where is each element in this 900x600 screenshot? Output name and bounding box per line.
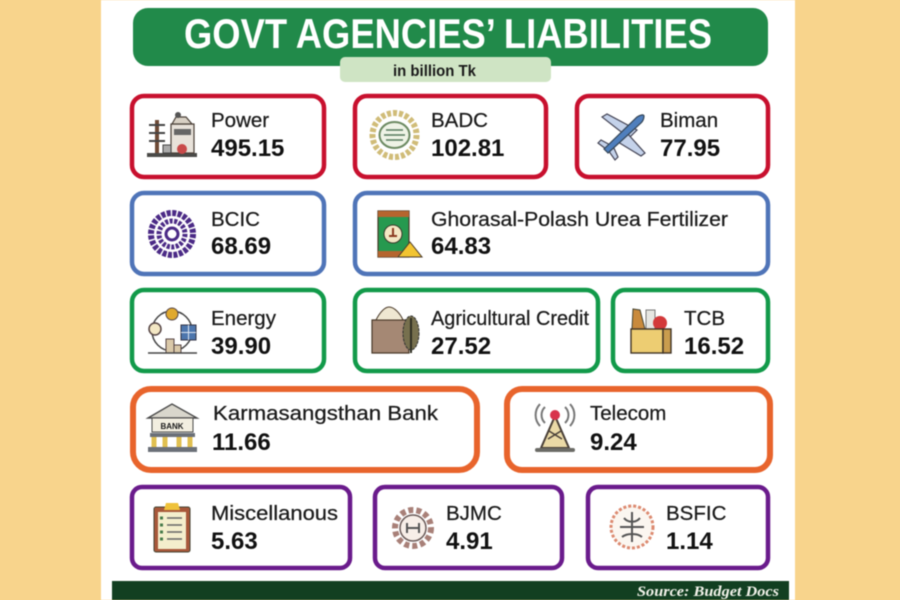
icon: clipboard	[154, 503, 190, 552]
panel: Biman: Biman	[660, 109, 718, 132]
panel: BCIC: 68.69	[211, 233, 271, 260]
panel: Agricultural Credit: 27.52	[431, 333, 491, 360]
panel: Telecom: Telecom	[590, 402, 666, 425]
panel: TCB: 16.52	[684, 333, 744, 360]
panel: Karmasangsthan Bank: 11.66	[212, 429, 271, 456]
panel: BCIC	[132, 193, 324, 274]
icon: BSFIC emblem	[611, 506, 653, 548]
panel: Energy: 39.90	[211, 333, 271, 360]
icon: BADC emblem	[372, 113, 416, 157]
footer bar with source	[112, 581, 789, 600]
icon: energy circle	[148, 308, 197, 353]
icon: fertilizer bag	[378, 211, 422, 257]
panel: BADC: 102.81	[431, 135, 504, 162]
icon: bank building: BANK	[160, 422, 184, 431]
panel: Power: Power	[211, 109, 269, 132]
subtitle: in billion Tk	[340, 57, 551, 82]
panel: BJMC: BJMC	[446, 502, 502, 525]
panel: BSFIC: 1.14	[666, 528, 713, 555]
panel: Energy	[132, 290, 324, 371]
panel: Biman: 77.95	[660, 135, 720, 162]
panel: Miscellanous: 5.63	[211, 528, 258, 555]
panel: Telecom: 9.24	[590, 429, 637, 456]
panel: Agricultural Credit	[355, 290, 598, 371]
panel: Ghorasal-Polash Urea Fertilizer: Ghorasal-Polash Urea Fertilizer	[431, 208, 728, 231]
icon: power pole and building	[147, 112, 197, 157]
title banner: GOVT AGENCIES’ LIABILITIES	[184, 10, 712, 57]
panel: BCIC: BCIC	[211, 208, 260, 231]
icon: telecom tower	[535, 404, 575, 452]
panel: Miscellanous	[132, 487, 350, 568]
icon: BJMC gear	[395, 510, 431, 546]
panel: BSFIC: BSFIC	[666, 502, 727, 525]
panel: BADC	[355, 96, 546, 177]
icon: grocery box	[631, 309, 671, 353]
panel: Ghorasal-Polash Urea Fertilizer	[355, 193, 768, 274]
panel: Karmasangsthan Bank: Karmasangsthan Bank	[213, 402, 439, 425]
panel: Karmasangsthan Bank	[133, 389, 477, 470]
panel: Telecom	[507, 389, 770, 470]
icon: airplane	[598, 114, 645, 160]
panel: Miscellanous: Miscellanous	[211, 502, 338, 525]
panel: TCB	[613, 290, 768, 371]
panel: Power: 495.15	[211, 135, 284, 162]
panel: Agricultural Credit: Agricultural Credit	[431, 307, 589, 330]
panel: Power	[132, 96, 324, 177]
panel: BJMC: 4.91	[446, 528, 493, 555]
panel: BSFIC	[588, 487, 768, 568]
icon: bank building	[148, 404, 197, 452]
panel: Energy: Energy	[211, 307, 277, 330]
icon: BCIC emblem	[151, 213, 193, 255]
panel: Ghorasal-Polash Urea Fertilizer: 64.83	[431, 233, 491, 260]
panel: BJMC	[375, 487, 562, 568]
icon: grain sack	[372, 307, 419, 353]
panel: BADC: BADC	[431, 109, 488, 132]
panel: TCB: TCB	[684, 307, 725, 330]
footer bar with source: Source: Budget Docs	[637, 584, 779, 600]
panel: Biman	[577, 96, 768, 177]
subtitle: in billion Tk: in billion Tk	[393, 63, 476, 80]
